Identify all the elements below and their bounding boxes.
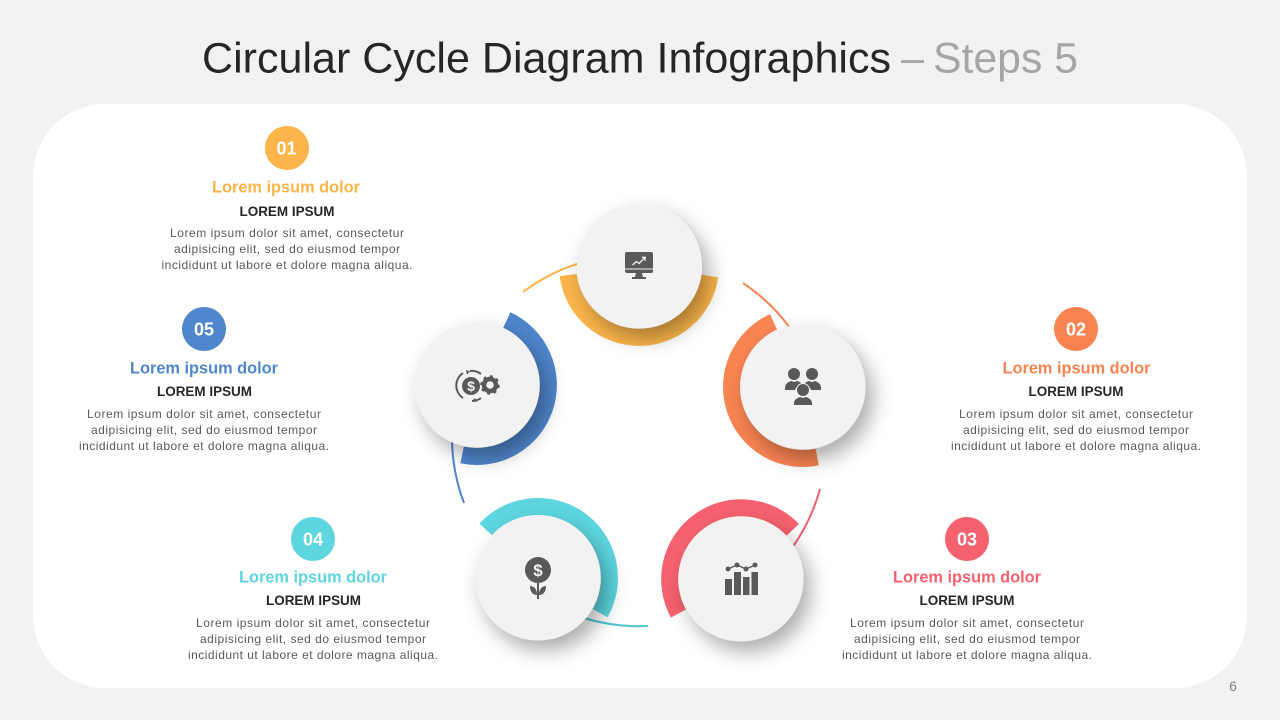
circle: step 2	[740, 324, 866, 450]
heading 02: Lorem ipsum dolor	[1002, 358, 1151, 378]
badge 04: 04	[303, 530, 323, 550]
body 04: incididunt ut labore et dolore magna aliqua.	[188, 648, 438, 662]
body 04: adipisicing elit, sed do eiusmod tempor	[200, 632, 426, 646]
subheading 01: LOREM IPSUM	[240, 204, 334, 219]
badge 05	[182, 307, 226, 351]
body 05: incididunt ut labore et dolore magna aliqua.	[79, 439, 329, 453]
connector arc: yellow	[523, 263, 580, 292]
icon: three people	[785, 368, 821, 405]
step 03 text block	[842, 517, 1092, 662]
connector arc: blue	[452, 440, 464, 503]
step 02 text block	[951, 307, 1201, 453]
body 01	[162, 226, 412, 272]
circle: step 4	[476, 516, 600, 640]
body 02: adipisicing elit, sed do eiusmod tempor	[963, 423, 1189, 437]
body 01: adipisicing elit, sed do eiusmod tempor	[174, 242, 400, 256]
body 05: adipisicing elit, sed do eiusmod tempor	[91, 423, 317, 437]
heading 01: Lorem ipsum dolor	[212, 178, 360, 196]
body 03: incididunt ut labore et dolore magna aliqua.	[842, 648, 1092, 662]
body 03: Lorem ipsum dolor sit amet, consectetur	[850, 616, 1084, 630]
page number: 6	[1229, 678, 1237, 694]
badge 02	[1054, 307, 1098, 351]
ring: teal	[486, 506, 609, 613]
step 01 text block	[162, 126, 412, 272]
body 05	[79, 407, 329, 453]
icon: bar chart with trend line	[725, 562, 758, 595]
body 04	[188, 616, 438, 662]
badge 03	[945, 517, 989, 561]
badge 01: 01	[276, 138, 297, 158]
body 02: Lorem ipsum dolor sit amet, consectetur	[959, 407, 1193, 421]
connector arc: red	[792, 489, 820, 548]
heading 05: Lorem ipsum dolor	[130, 358, 278, 378]
icon: monitor with rising chart	[625, 252, 653, 279]
body 04: Lorem ipsum dolor sit amet, consectetur	[196, 616, 430, 630]
subheading 05: LOREM IPSUM	[157, 384, 252, 399]
step 04 text block	[188, 517, 438, 662]
circle: step 1	[577, 204, 702, 328]
badge 05: 05	[194, 320, 214, 340]
heading 04: Lorem ipsum dolor	[239, 568, 387, 586]
body 03: adipisicing elit, sed do eiusmod tempor	[854, 632, 1080, 646]
title: –	[901, 34, 924, 82]
subheading 03: LOREM IPSUM	[920, 593, 1014, 608]
circle: step 5	[414, 322, 540, 448]
connector arc: orange	[743, 283, 790, 328]
body 03	[842, 616, 1092, 662]
panel: white background	[33, 104, 1247, 688]
heading 03: Lorem ipsum dolor	[893, 568, 1041, 586]
body 01: Lorem ipsum dolor sit amet, consectetur	[170, 226, 404, 240]
badge 04	[291, 517, 335, 561]
ring: blue	[462, 320, 548, 456]
icon: dollar and gear	[456, 370, 498, 402]
connector arc: teal	[584, 618, 648, 626]
subheading 02: LOREM IPSUM	[1028, 384, 1124, 399]
icon: dollar and gear: $	[467, 378, 475, 394]
body 01: incididunt ut labore et dolore magna aliqua.	[162, 258, 412, 272]
step 05 text block	[79, 307, 329, 453]
body 02: incididunt ut labore et dolore magna aliqua.	[951, 439, 1201, 453]
badge 03: 03	[957, 530, 977, 550]
title: Steps 5	[933, 34, 1078, 82]
ring: red	[670, 508, 793, 614]
subheading 04: LOREM IPSUM	[266, 593, 361, 608]
badge 02: 02	[1066, 320, 1086, 340]
badge 01	[265, 126, 309, 170]
ring: orange	[732, 322, 817, 459]
body 02	[951, 407, 1201, 453]
body 05: Lorem ipsum dolor sit amet, consectetur	[87, 407, 321, 421]
ring: yellow	[568, 275, 710, 337]
cycle diagram	[414, 204, 866, 642]
title: Circular Cycle Diagram Infographics	[202, 34, 891, 82]
circle: step 3	[678, 516, 804, 642]
icon: money plant: $	[533, 561, 543, 580]
icon: money plant	[525, 557, 551, 599]
